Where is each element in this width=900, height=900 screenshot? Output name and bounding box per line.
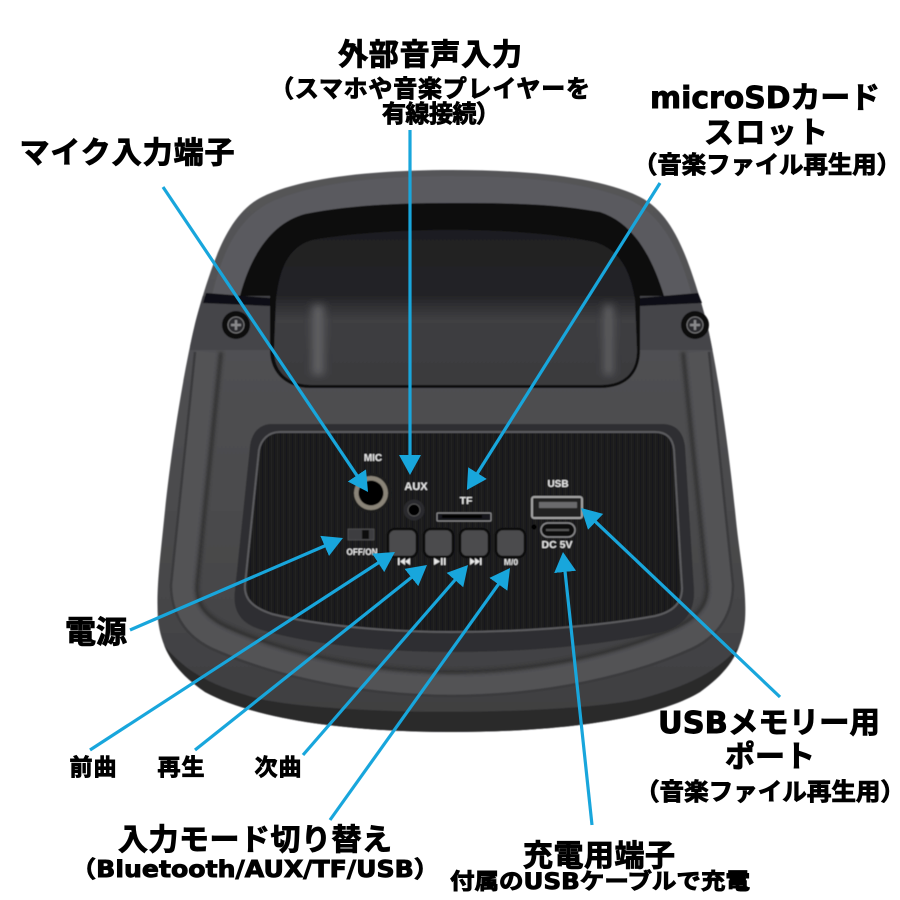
- buttons: [388, 529, 525, 557]
- panel printed labels: DC 5V: [542, 539, 572, 551]
- band outer edge: [171, 352, 733, 696]
- body outer raised band: [172, 482, 732, 695]
- arrow: previous: [90, 554, 392, 750]
- label: power: 電源: [65, 615, 127, 651]
- label: USB memory port: （音楽ファイル再生用）: [635, 778, 900, 806]
- panel printed labels: [346, 453, 572, 567]
- handle top band: [212, 176, 692, 296]
- label: next: 次曲: [254, 755, 302, 781]
- label: input mode switch: 入力モード切り替え: [118, 823, 392, 858]
- panel printed labels: AUX: [404, 481, 428, 493]
- bracket shadows: [203, 293, 702, 306]
- label: play: 再生: [158, 755, 204, 781]
- microSD slot: [437, 513, 491, 521]
- aux jack: [404, 500, 424, 520]
- arrow: next: [303, 568, 465, 755]
- left screw: [222, 311, 250, 339]
- label: external audio input: 有線接続）: [382, 100, 500, 128]
- arrow: play: [195, 568, 424, 750]
- label: charging port: 充電用端子: [523, 839, 675, 874]
- arrow: USB: [584, 511, 780, 697]
- label: external audio input: [270, 38, 590, 128]
- label: external audio input: （スマホや音楽プレイヤーを: [270, 75, 590, 103]
- label: previous: 前曲: [70, 755, 116, 781]
- handle dark recess rim: [240, 203, 664, 388]
- handle recess interior: [274, 230, 637, 385]
- speaker rear photo: [150, 170, 755, 740]
- USB port: [532, 497, 582, 518]
- arrow: mic: [163, 187, 366, 489]
- panel printed labels: MIC: [364, 453, 382, 464]
- right screw: [681, 311, 709, 339]
- speaker body: [157, 170, 745, 732]
- label: microSD slot: （音楽ファイル再生用）: [633, 151, 900, 179]
- panel printed labels: TF: [460, 495, 473, 507]
- USB-C port: [532, 523, 575, 537]
- panel printed labels: USB: [547, 479, 569, 490]
- arrow: aux: [408, 130, 412, 471]
- arrow: charge port: [563, 556, 592, 825]
- power switch: [348, 529, 374, 540]
- label: microSD slot: スロット: [704, 116, 828, 151]
- arrows: [90, 130, 780, 825]
- body lower rim shadow: [164, 646, 740, 733]
- arrow: mode: [330, 571, 508, 820]
- body details clipped to silhouette: [150, 352, 755, 740]
- arrow: microSD: [469, 183, 660, 487]
- panel printed labels: M/0: [504, 557, 518, 567]
- label: microSD slot: [633, 81, 900, 179]
- label: input mode switch: [71, 823, 439, 883]
- playback icons: [398, 558, 482, 565]
- label: mic input: マイク入力端子: [20, 136, 234, 171]
- label: charging port: [450, 839, 750, 895]
- label: input mode switch: （Bluetooth/AUX/TF/USB）: [71, 857, 439, 883]
- recess highlights: [312, 305, 613, 375]
- label: charging port: 付属のUSBケーブルで充電: [450, 869, 750, 895]
- label: USB memory port: USBメモリー用: [658, 706, 880, 741]
- control plate: [245, 432, 682, 632]
- panel printed labels: OFF/ON: [346, 547, 378, 557]
- label: USB memory port: [635, 706, 900, 806]
- band inner edge: [197, 352, 707, 672]
- label: external audio input: 外部音声入力: [338, 38, 522, 73]
- side brackets: [190, 296, 715, 350]
- mic jack: [351, 473, 391, 513]
- plate frame: [234, 424, 694, 652]
- label: USB memory port: ポート: [725, 740, 815, 775]
- label: microSD slot: microSDカード: [650, 81, 880, 116]
- arrow: power: [130, 540, 339, 630]
